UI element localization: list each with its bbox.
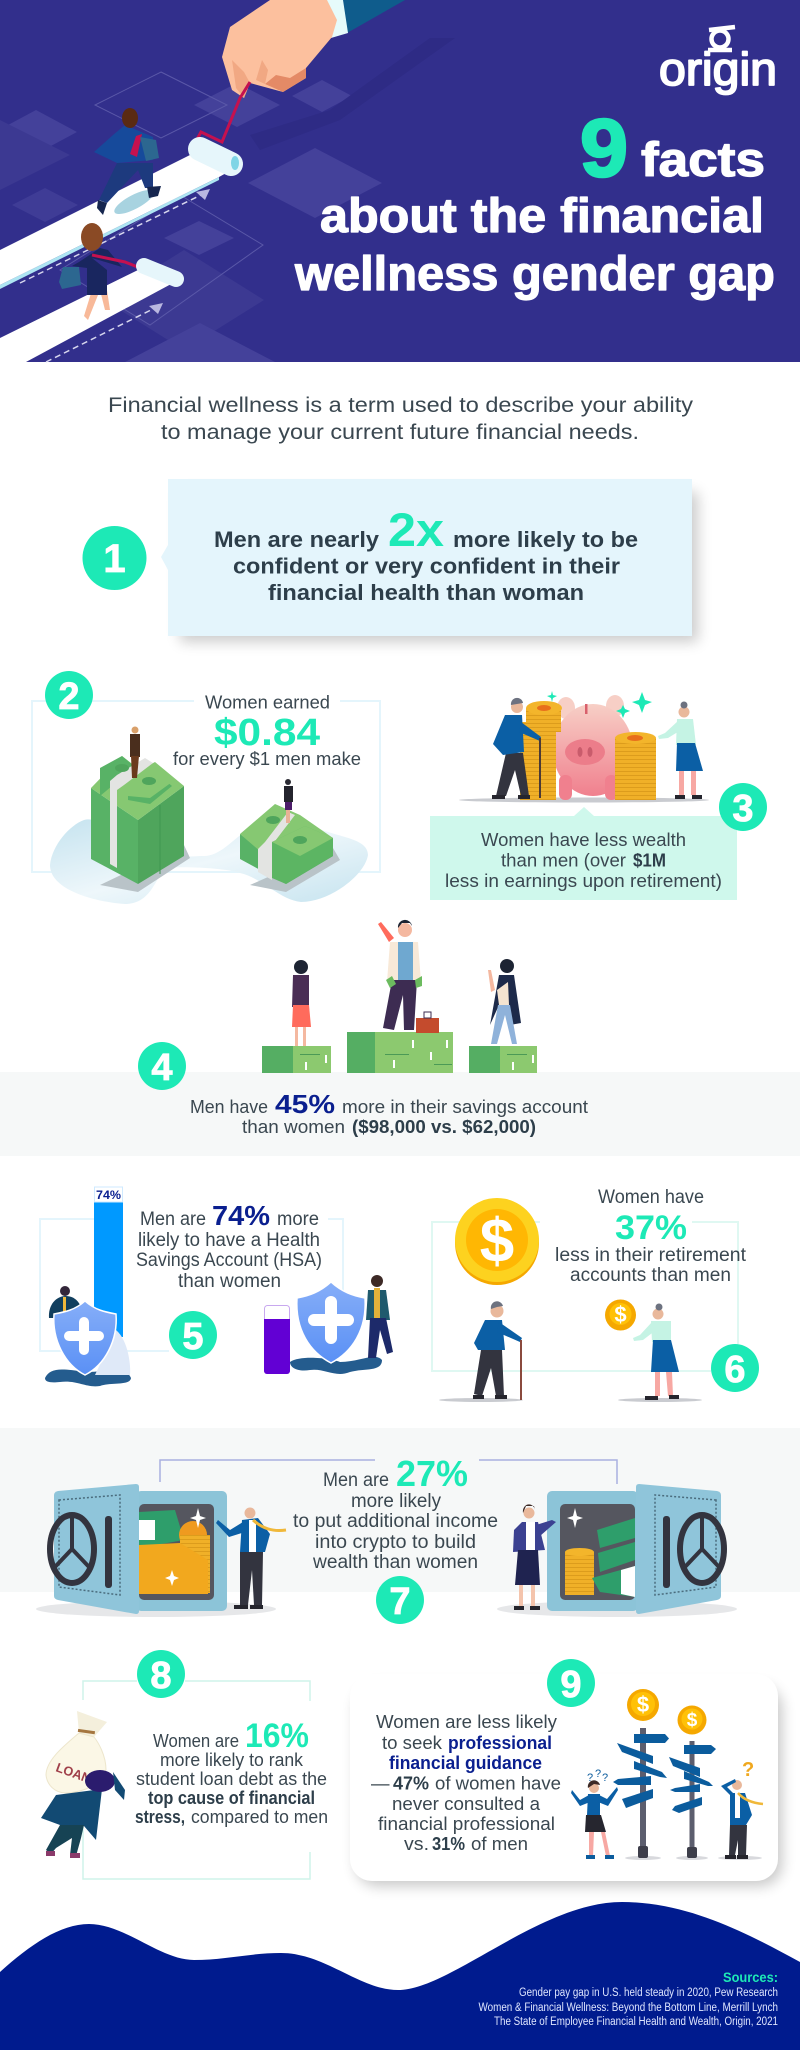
fact 4 text: Men have: [190, 1097, 268, 1117]
coins on posts: $: [637, 1692, 649, 1717]
intro text: to manage your current future financial needs.: [161, 421, 639, 444]
fact 4 text: more in their savings account: [342, 1097, 588, 1117]
loan sack and graduate: LOAN: [54, 1760, 93, 1786]
fact 5 text: than women: [178, 1271, 281, 1292]
fact 8 text: 16%: [245, 1717, 309, 1755]
number 1: 1: [103, 537, 126, 581]
fact 2 text: for every $1 men make: [173, 749, 361, 769]
fact 5 text: likely to have a Health: [138, 1230, 320, 1251]
fact 1 text: financial health than woman: [268, 580, 584, 605]
small coin: $: [614, 1302, 627, 1327]
fact 7 text: Men are: [323, 1470, 389, 1491]
frame: [432, 1222, 738, 1371]
number 7: 7: [389, 1581, 411, 1623]
fact 5 text: Men are: [140, 1209, 206, 1230]
number 6: [711, 1344, 759, 1392]
frame: [32, 701, 380, 872]
callout box: [430, 807, 737, 900]
right shield with woman: [290, 1275, 393, 1374]
confused woman: ?: [587, 1772, 593, 1784]
fact 9 text: financial guidance: [389, 1752, 542, 1773]
center man: [378, 920, 439, 1033]
right woman: [488, 959, 521, 1044]
band: [0, 1428, 800, 1592]
number 2: 2: [58, 676, 80, 718]
number 4: 4: [151, 1047, 173, 1089]
dashed arrows: [20, 189, 210, 362]
number 7: [376, 1576, 424, 1624]
loan sack and graduate: [41, 1700, 125, 1858]
fact 9 text: never consulted a: [392, 1793, 541, 1814]
fact 5 text: 74%: [212, 1200, 270, 1231]
running man: [94, 108, 161, 219]
right safe with woman: [497, 1484, 737, 1617]
woman on stack: [284, 779, 293, 823]
ground: [459, 798, 709, 802]
fact 8 text: top cause of financial: [148, 1788, 315, 1808]
fact 7 text: into crypto to build: [315, 1532, 476, 1553]
sparkles: [547, 691, 652, 718]
fact 7 text: more likely: [351, 1491, 441, 1512]
fact 4: [0, 920, 800, 1156]
title: facts: [641, 134, 765, 187]
number 1: [82, 526, 146, 590]
fact 7 text: wealth than women: [312, 1552, 478, 1573]
frame: [40, 1219, 343, 1351]
left safe with man: [36, 1484, 286, 1617]
intro text: [108, 394, 694, 444]
fact 2 text: [173, 692, 361, 769]
fact 5 text: Savings Account (HSA): [136, 1250, 322, 1271]
fact 6: [432, 1187, 759, 1402]
number 3: [719, 783, 767, 831]
left coin stack: [520, 701, 562, 800]
fact 3: [430, 691, 767, 900]
fact 1 text: 2x: [388, 503, 444, 556]
fact 1: [82, 479, 698, 642]
fact 9 text: —: [371, 1772, 390, 1794]
fact 2 text: Women earned: [205, 692, 330, 712]
fact 7 text: 27%: [396, 1453, 468, 1494]
fact 5 text: more: [277, 1209, 319, 1230]
fact 3 text: less in earnings upon retirement): [445, 871, 722, 891]
confused man: ?: [742, 1759, 754, 1781]
walking woman: [59, 223, 176, 320]
man: [492, 698, 541, 799]
coins on posts: $: [687, 1710, 698, 1731]
Origin logo: origin: [659, 43, 777, 95]
bracket: [160, 1460, 617, 1484]
fact 1 text: [214, 503, 638, 605]
fact 9 text: of men: [471, 1833, 528, 1854]
fact 2 text: $0.84: [214, 712, 320, 754]
hand holding roller: [195, 0, 405, 170]
fact 9 text: financial professional: [378, 1813, 555, 1834]
left woman: [292, 960, 311, 1046]
short money stack: [240, 804, 340, 892]
sources: [478, 1969, 778, 2028]
fact 8: [41, 1650, 328, 1879]
background diamonds: [0, 38, 455, 362]
fact 6 text: Women have: [598, 1187, 704, 1208]
woman: [618, 1304, 702, 1402]
title: about the financial: [320, 190, 764, 243]
card: [350, 1674, 782, 1886]
frame: [83, 1681, 310, 1879]
piggy bank: [553, 695, 633, 800]
fact 8 text: compared to men: [191, 1807, 328, 1827]
fact 7 text: to put additional income: [293, 1511, 498, 1532]
title: 9: [580, 103, 628, 194]
footer: [0, 1902, 800, 2050]
big coin: $: [480, 1207, 514, 1276]
roads painted white: [0, 153, 237, 362]
fact 4 text: 45%: [275, 1089, 335, 1119]
number 2: [45, 671, 93, 719]
confused man: [718, 1759, 763, 1860]
confused woman: [571, 1768, 618, 1859]
fact 8 text: more likely to rank: [160, 1750, 304, 1770]
fact 2: [32, 671, 380, 904]
fact 1 text: more likely to be: [453, 527, 638, 552]
signposts: [613, 1728, 716, 1860]
fact 9 text: professional: [448, 1732, 552, 1753]
fact 9 text: to seek: [382, 1732, 443, 1753]
title: [294, 103, 775, 301]
number 4: [138, 1042, 186, 1090]
fact 4 text: [190, 1089, 588, 1137]
fact 8 text: student loan debt as the: [136, 1769, 327, 1789]
fact 9 text: of women have: [435, 1772, 561, 1794]
woman: [658, 702, 703, 799]
right coin stack: [615, 732, 656, 800]
fact 9 text: 31%: [432, 1833, 465, 1854]
number 6: 6: [724, 1349, 746, 1391]
big coin: [455, 1198, 539, 1285]
coins on posts: [627, 1689, 706, 1734]
number 5: [169, 1311, 217, 1359]
fact 3 text: [445, 830, 722, 891]
title: wellness gender gap: [294, 248, 775, 301]
fact 8 text: stress,: [135, 1807, 185, 1827]
tall money stack: [91, 756, 190, 892]
fact 4 text: than women: [242, 1117, 345, 1137]
number 8: [137, 1650, 185, 1698]
fact 3 text: Women have less wealth: [481, 830, 686, 850]
fact 4 text: ($98,000 vs. $62,000): [352, 1117, 536, 1137]
fact 1 text: Men are nearly: [214, 527, 380, 552]
water blob: [50, 819, 368, 904]
man on stack: [130, 726, 140, 778]
fact 9 text: Women are less likely: [376, 1711, 558, 1732]
old man: [439, 1301, 523, 1402]
fact 5: [40, 1187, 393, 1386]
fact 9: [350, 1659, 782, 1886]
fact 9 text: vs.: [404, 1833, 429, 1854]
women bar: [264, 1306, 290, 1374]
fact 7 text: [293, 1453, 498, 1573]
confused woman: ?: [602, 1772, 608, 1784]
intro text: Financial wellness is a term used to describe your ability: [108, 394, 694, 417]
wave: [0, 1902, 800, 2050]
men bar with 74% label: 74%: [96, 1188, 121, 1202]
fact 9 text: [371, 1711, 561, 1854]
fact 6 text: [555, 1187, 747, 1286]
left shield with man: [45, 1286, 131, 1386]
fact 5 text: [136, 1200, 322, 1292]
confused woman: ?: [595, 1768, 601, 1780]
sources: Sources:: [723, 1969, 778, 1985]
number 9: 9: [560, 1664, 582, 1706]
fact 6 text: less in their retirement: [555, 1245, 747, 1266]
fact 6 text: 37%: [615, 1209, 687, 1247]
small coin: [605, 1300, 636, 1330]
band: [0, 1072, 800, 1156]
fact 3 text: $1M: [633, 850, 666, 870]
number 3: 3: [732, 788, 754, 830]
fact 6 text: accounts than men: [570, 1265, 731, 1286]
number 5: 5: [182, 1316, 204, 1358]
number 9: [547, 1659, 595, 1707]
men bar with 74% label: [94, 1187, 123, 1337]
callout box: [161, 479, 698, 642]
fact 9 text: 47%: [393, 1772, 429, 1794]
number 8: 8: [150, 1655, 172, 1697]
fact 1 text: confident or very confident in their: [233, 554, 620, 578]
header banner: [0, 0, 800, 362]
fact 3 text: than men (over: [501, 850, 626, 870]
fact 8 text: [135, 1717, 328, 1827]
fact 7: [0, 1428, 800, 1624]
money pedestals: [262, 1032, 537, 1073]
fact 8 text: Women are: [153, 1731, 239, 1751]
